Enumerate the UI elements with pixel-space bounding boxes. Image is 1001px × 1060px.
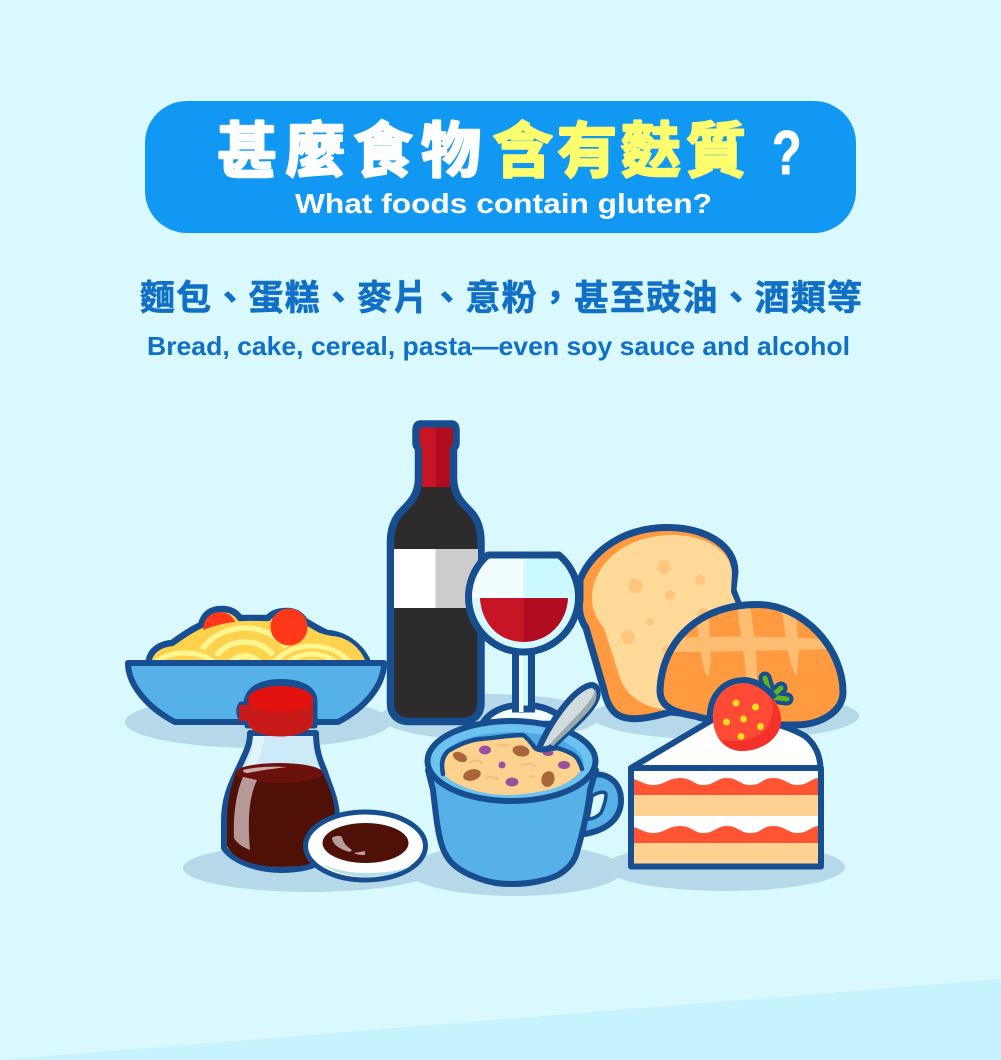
tomato front xyxy=(270,608,308,646)
subtitle english: Bread, cake, cereal, pasta—even soy sauce and alcohol xyxy=(147,331,850,361)
soy cap xyxy=(239,682,315,726)
wine glass xyxy=(468,555,578,724)
spoon xyxy=(540,685,598,749)
bun xyxy=(660,604,843,725)
cup inner xyxy=(442,735,582,795)
title chinese: 含有麩質 xyxy=(493,118,746,185)
highlights xyxy=(234,777,257,850)
noodles xyxy=(152,620,365,660)
title english: What foods contain gluten? xyxy=(295,188,712,219)
title chinese: 甚麼食物 xyxy=(217,118,481,185)
cereal cup xyxy=(428,685,621,884)
subtitle chinese: 麵包、蛋糕、麥片、意粉，甚至豉油、酒類等 xyxy=(140,279,862,318)
dish sauce xyxy=(322,823,408,863)
soy sauce bottle xyxy=(224,682,337,870)
bowl body xyxy=(128,663,384,722)
bottle foil xyxy=(420,428,436,487)
bun score marks xyxy=(674,608,826,684)
bottle label xyxy=(394,549,436,608)
glass stem xyxy=(516,645,532,709)
bottom wedge xyxy=(0,979,1001,1060)
ground shadows xyxy=(125,692,859,896)
cake top xyxy=(631,718,820,768)
cake slice xyxy=(631,678,821,866)
cup body xyxy=(428,770,596,884)
bread crumb xyxy=(592,535,760,712)
tomato back xyxy=(203,612,237,646)
glass base xyxy=(482,705,566,724)
title chinese: ? xyxy=(772,118,802,187)
noodle mound outline xyxy=(149,609,367,660)
cup handle xyxy=(578,774,621,835)
cereal toppings xyxy=(451,744,570,788)
neck highlight xyxy=(244,736,264,770)
strawberry seeds xyxy=(723,700,764,740)
bread holes xyxy=(622,560,709,657)
bread slice xyxy=(579,528,760,719)
pasta bowl xyxy=(128,608,384,734)
strawberry leaves xyxy=(765,678,787,699)
title banner xyxy=(145,101,856,233)
sauce xyxy=(227,763,335,867)
strawberry xyxy=(713,683,781,751)
wine bottle xyxy=(390,424,481,722)
cake layers xyxy=(631,768,821,866)
wine xyxy=(480,598,524,642)
glass bowl xyxy=(468,555,578,652)
bottle glass xyxy=(224,733,337,870)
soy dish xyxy=(306,812,426,880)
title chinese xyxy=(217,118,802,187)
cup rim xyxy=(428,721,596,801)
